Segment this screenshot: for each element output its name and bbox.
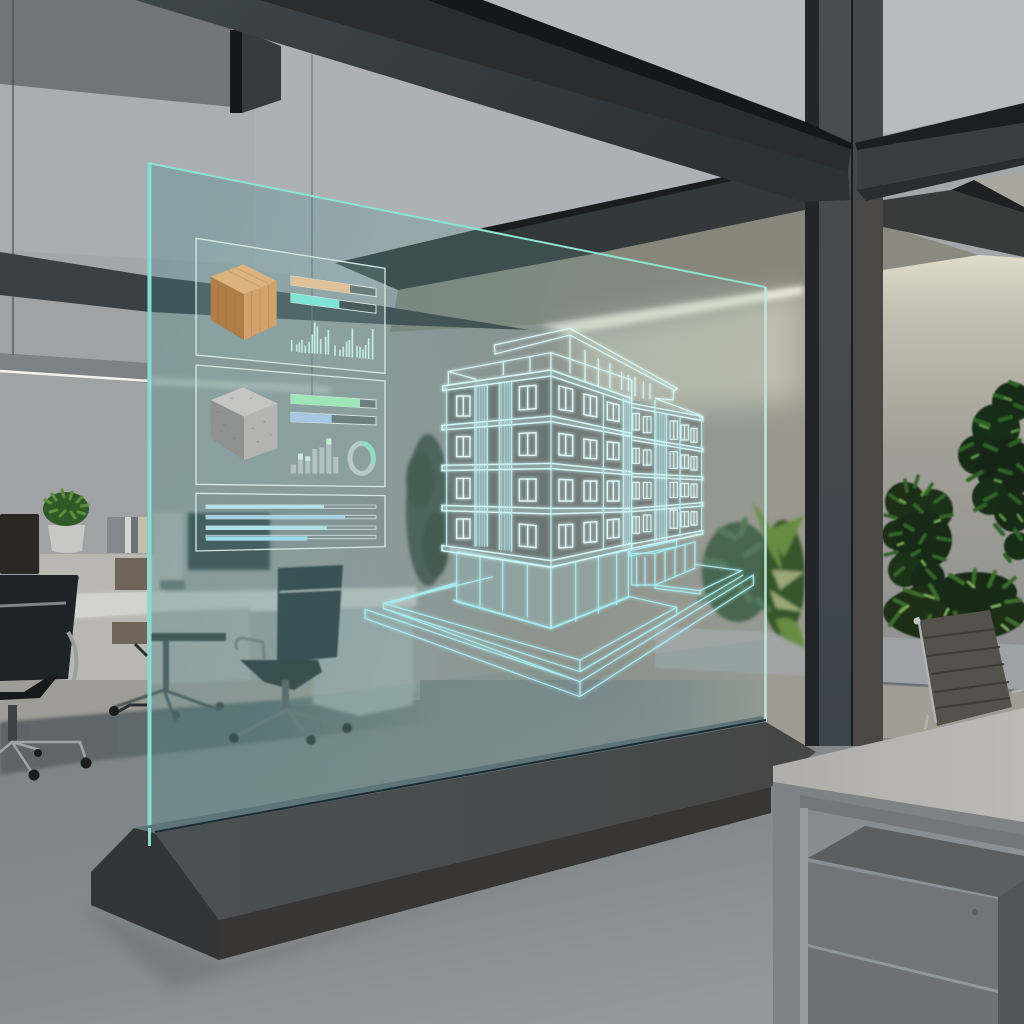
plants behind glass, right — [700, 502, 805, 648]
plant right, tall — [958, 382, 1024, 561]
holographic material panels — [196, 238, 385, 551]
foreground chair, left — [0, 575, 92, 780]
floor — [0, 680, 1024, 1024]
ceiling drop column — [230, 30, 281, 113]
right steel beams — [855, 103, 1024, 257]
plant right, medium — [882, 476, 953, 595]
main steel beam — [135, 0, 851, 202]
ground floor — [453, 541, 695, 628]
back beam behind glass — [335, 177, 805, 290]
building faces — [447, 370, 703, 628]
shadow on floor — [0, 688, 440, 775]
site plinth — [365, 564, 753, 697]
planter right — [883, 637, 1024, 691]
shadow of plinth — [80, 815, 771, 990]
cabinet and chair, far left — [75, 558, 147, 716]
left lit floor — [0, 680, 420, 724]
chair right — [914, 610, 1024, 729]
panel: concrete material — [196, 365, 385, 487]
beige strip under planters — [640, 668, 805, 748]
planter behind glass, right — [655, 627, 805, 676]
panel: wood material — [196, 238, 385, 373]
plinth base — [91, 716, 816, 960]
low shrub right — [883, 570, 1024, 642]
panel: summary bars — [196, 493, 385, 551]
pendant light — [0, 0, 330, 400]
left wall beam — [0, 252, 530, 330]
left office: cabinet, monitor, plant, books — [0, 490, 165, 680]
roof structures — [448, 328, 700, 420]
chair behind glass, centre — [229, 565, 352, 745]
glass display pane — [148, 163, 766, 846]
holographic wireframe building — [365, 328, 753, 697]
back desk, shelf and monitor behind glass — [75, 513, 417, 716]
right foreground desk — [773, 708, 1024, 1024]
building uprights — [447, 370, 702, 628]
chair behind glass, left — [112, 633, 226, 722]
right drawer cabinet — [808, 826, 1024, 1024]
plant behind glass, centre — [406, 434, 450, 586]
steel column — [805, 0, 883, 746]
floor slabs — [442, 370, 703, 567]
windows — [457, 385, 697, 548]
strip right of column — [883, 685, 1024, 738]
